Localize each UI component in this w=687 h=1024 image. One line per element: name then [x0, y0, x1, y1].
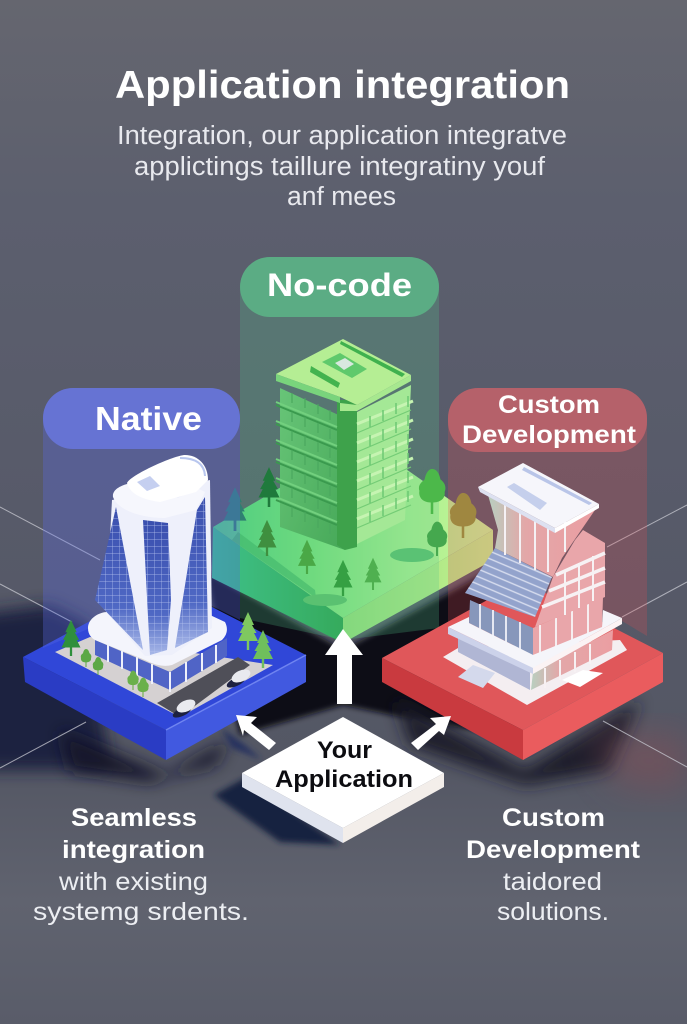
native label pill: Native — [95, 400, 202, 437]
no-code building — [276, 339, 413, 550]
your application block: Your — [317, 737, 372, 764]
panel: custom development — [382, 388, 663, 760]
no-code platform — [212, 439, 493, 643]
native translucent column — [43, 388, 240, 648]
custom development caption: Development — [466, 836, 641, 864]
custom development caption: Custom — [502, 804, 605, 832]
panel: native — [23, 388, 306, 760]
no-code label pill — [240, 257, 439, 317]
intro text: anf mees — [287, 183, 396, 211]
native trees and cars — [62, 612, 273, 720]
native caption: systemg srdents. — [33, 898, 249, 926]
custom platform — [382, 581, 663, 760]
connector lines — [0, 505, 687, 768]
panel: no-code — [212, 257, 493, 643]
title: Application integration — [115, 64, 570, 107]
intro text: Integration, our application integratve — [117, 122, 567, 150]
custom development caption — [466, 804, 641, 926]
intro text — [117, 122, 567, 211]
no-code translucent column — [240, 257, 439, 640]
floor shadows — [0, 565, 687, 845]
native label pill — [43, 388, 240, 449]
custom label pill: Development — [462, 421, 637, 449]
your application block: Application — [275, 766, 413, 793]
arrow: to native — [236, 715, 276, 750]
native platform — [23, 582, 306, 760]
native tower — [88, 455, 227, 692]
native caption: with existing — [58, 868, 208, 896]
native caption: integration — [62, 836, 205, 864]
custom label pill: Custom — [498, 391, 600, 419]
native caption: Seamless — [71, 804, 197, 832]
intro text: applictings taillure integratiny youf — [134, 153, 546, 181]
your application block — [242, 717, 444, 843]
custom development caption: taidored — [503, 868, 602, 896]
arrow: to no-code — [325, 629, 363, 704]
arrow: to custom development — [411, 716, 451, 750]
custom label pill — [448, 388, 647, 452]
custom development caption: solutions. — [497, 898, 609, 926]
native plot and road — [55, 637, 273, 717]
no-code trees — [224, 467, 476, 596]
native caption — [33, 804, 249, 926]
no-code label pill: No-code — [267, 267, 412, 303]
custom translucent column — [448, 388, 647, 636]
custom tower — [443, 463, 627, 705]
